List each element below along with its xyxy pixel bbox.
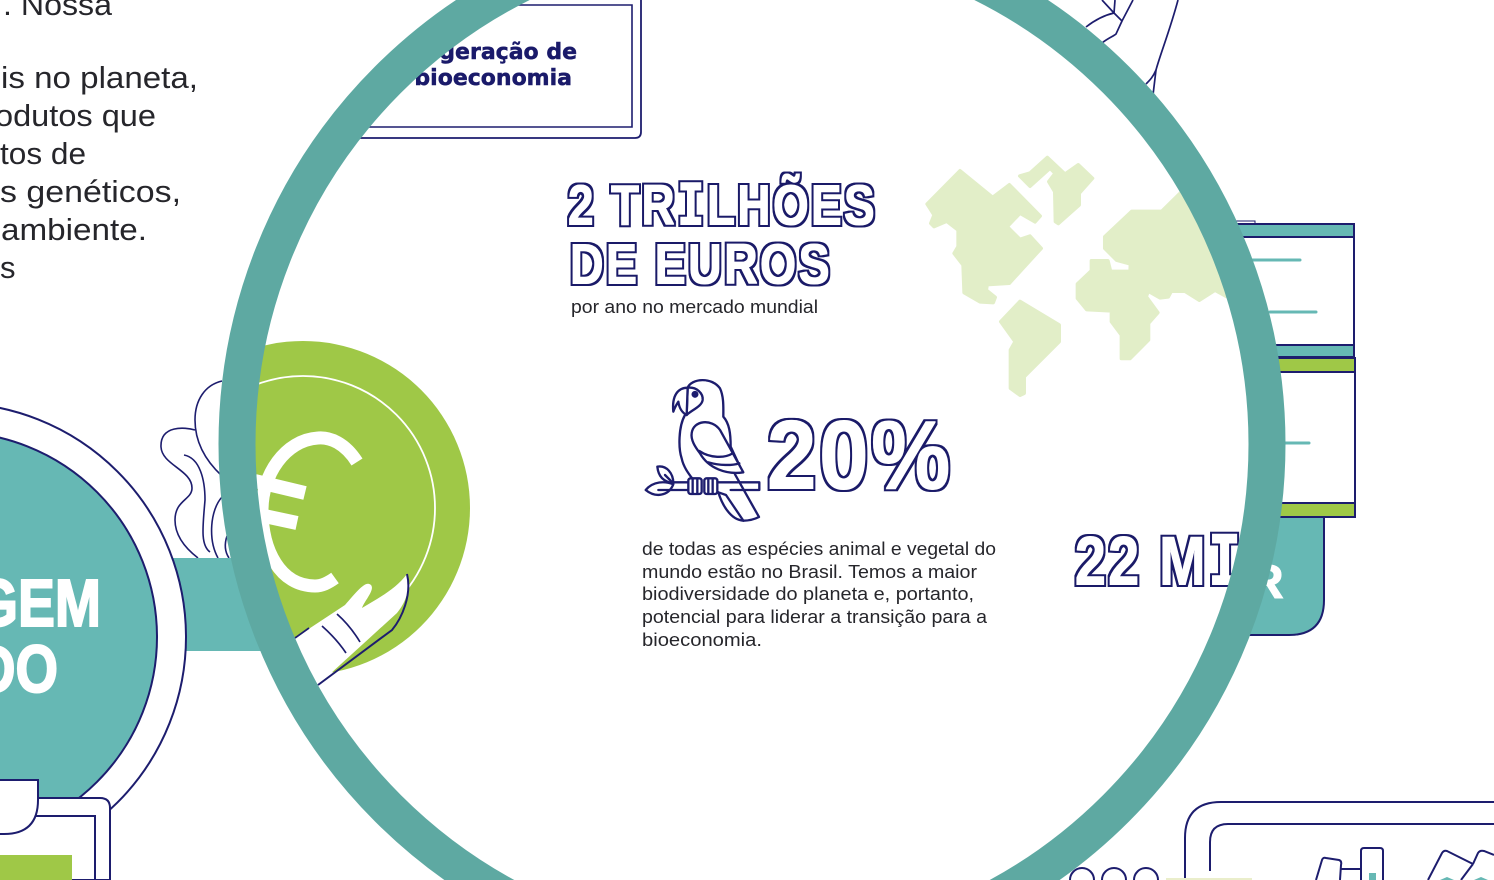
panel: geração de bioeconomia card	[360, 0, 642, 139]
chart: world map	[925, 156, 1226, 397]
connector bar	[170, 558, 270, 651]
magnifier contents	[136, 0, 1280, 700]
magnifier white lens	[255, 0, 1249, 880]
text block: left paragraph: tos de	[0, 136, 86, 171]
panel: bottom-right device	[1070, 802, 1494, 880]
icon: hand holding coin	[294, 574, 410, 686]
text block: left paragraph: ambiente.	[1, 212, 147, 247]
text block: left paragraph: s	[0, 250, 16, 285]
text: por ano no mercado mundial: por ano no mercado mundial	[571, 297, 818, 317]
panel: geração de bioeconomia card: A geração de	[415, 40, 577, 65]
icon: green euro coin	[256, 341, 470, 672]
panel: right stacked cards	[1180, 221, 1355, 635]
heading: 2 trilhões de euros: 2 TRILHÕES	[568, 172, 877, 238]
magnifier ring	[237, 0, 1267, 880]
heading: 22 mil: 22 MIL	[1075, 522, 1280, 602]
text block: biodiversity description: de todas as espécies animal e vegetal do	[642, 539, 996, 559]
heading: 2 trilhões de euros	[568, 172, 877, 296]
text block: biodiversity description: bioeconomia.	[642, 630, 762, 650]
heading: 2 trilhões de euros: DE EUROS	[570, 232, 832, 296]
text block: biodiversity description	[642, 539, 996, 650]
icon: smoke lines	[161, 381, 229, 558]
text block: left paragraph	[0, 0, 198, 285]
label: white letter R on teal tab: R	[1249, 556, 1284, 609]
heading: 20%: 20%	[767, 400, 953, 510]
panel: bottom-left card	[0, 780, 110, 880]
text block: biodiversity description: potencial para liderar a transição para a	[642, 607, 988, 627]
panel: geração de bioeconomia card: bioeconomia	[414, 66, 572, 91]
icon: parrot on branch	[646, 380, 759, 521]
text block: biodiversity description: biodiversidade do planeta e, portanto,	[642, 584, 974, 604]
text block: biodiversity description: mundo estão no Brasil. Temos a maior	[642, 562, 977, 582]
icon: plant lines top right	[1086, 0, 1178, 95]
text block: left paragraph: s genéticos,	[0, 174, 181, 209]
panel: teal circle badge	[0, 403, 186, 871]
text block: left paragraph: is no planeta,	[1, 60, 198, 95]
